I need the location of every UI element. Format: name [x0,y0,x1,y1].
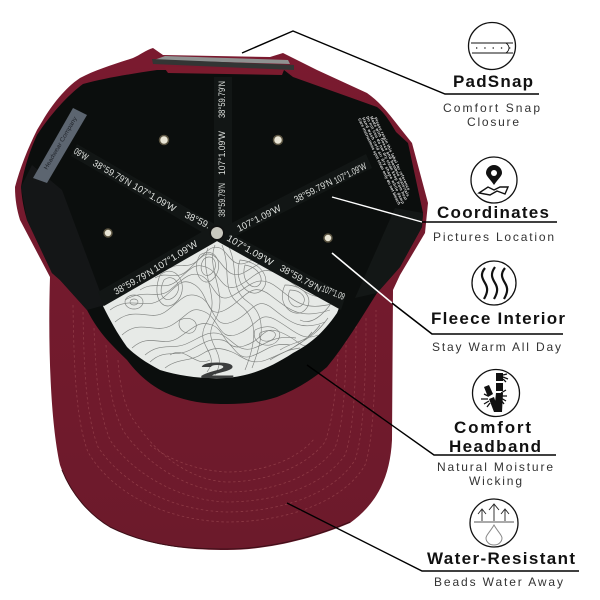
coordinate tape: upper right: 107°1.09'W [332,161,369,187]
text: Natural Moisture Wicking: Wicking [469,474,522,488]
cap photo [15,48,428,550]
leader line: Coordinates [332,197,557,222]
printed care text: Care instructions spot clean only do not bleach [357,117,402,206]
coordinate tape: lower right: 107°1.09'W [224,233,275,269]
coordinate tape: upper right: 38°59.79'N [292,177,335,206]
text: Comfort Snap Closure [443,101,540,129]
heading: Comfort Headband: Headband [449,437,541,456]
woven side label: Headwear Company [44,116,79,171]
coordinate tape: top: 38°59.79'N [217,183,228,217]
leader line: PadSnap [242,31,539,94]
printed care text: Please retain this label for reference [373,116,412,192]
leader line: Fleece Interior [332,253,563,334]
text: Comfort Snap Closure: Comfort Snap [443,101,540,115]
sweatband left shade [21,165,105,310]
heading: Water-Resistant: Water-Resistant [427,549,575,568]
heading: PadSnap: PadSnap [453,72,533,91]
leader line: Comfort Headband [307,365,556,455]
black interior [21,70,423,404]
coordinate tape: lower left: 38°59.79'N [112,267,156,298]
coordinate tape: top: 38°59.79'N [217,81,228,118]
printed care text: Do not iron do not dry clean keep from heat [365,115,409,201]
cap crown shell [15,48,428,550]
coordinate tape: lower right [215,228,346,310]
coordinate tape: upper left: 09'W [71,146,90,163]
coordinate tape: top [214,77,232,230]
printed care text: Made with fleece and bamboo materials [369,115,411,198]
text: Beads Water Away: Beads Water Away [434,575,563,589]
woven side label [33,108,87,183]
padsnap strap [152,56,294,75]
printed care text: Hand wash cold air dry shape while damp [361,116,406,205]
heading: Fleece Interior: Fleece Interior [431,309,565,328]
text: Pictures Location: Pictures Location [433,230,554,244]
icon: heat waves [472,261,516,305]
icon: water-resistant [470,499,518,547]
icon: padsnap strap [468,22,516,70]
coordinate tape: upper left: 107°1.09'W [130,181,178,215]
heading: Comfort Headband: Comfort [454,418,531,437]
coordinate tape: upper left: 38°59.79'N [90,158,133,189]
text: Stay Warm All Day: Stay Warm All Day [432,340,561,354]
coordinate tape: lower left: 107°1.09'W [152,239,200,275]
icon: map pin [471,157,517,203]
coordinate tape: lower right: 107°1.09 [320,284,346,303]
sweatband right shade [355,208,423,298]
heading: Coordinates: Coordinates [437,203,549,222]
fleece size number: 2 [199,358,236,383]
heading: Comfort Headband [449,418,541,456]
leader line: Water-Resistant [287,503,579,571]
text: Natural Moisture Wicking [437,460,553,488]
coordinate tape: lower left [98,226,219,306]
vent eyelets [104,136,332,242]
coordinate tape: upper right: 107°1.09'W [235,203,283,235]
coordinate tape: upper left: 38°59. [183,210,212,232]
topographic contour lines [110,245,338,375]
icon: bamboo [472,370,520,416]
coordinate tape: top: 107°1.09'W [217,131,228,175]
coordinate tape: lower right: 38°59.79'N [278,263,323,295]
center snap button [210,226,224,240]
text: Comfort Snap Closure: Closure [467,115,519,129]
coordinate tape: upper right [222,154,372,240]
text: Natural Moisture Wicking: Natural Moisture [437,460,553,474]
fleece panel [103,241,343,378]
brim edge seam [62,470,350,549]
coordinate tape: upper left [71,144,218,238]
brim stitching [73,305,376,522]
